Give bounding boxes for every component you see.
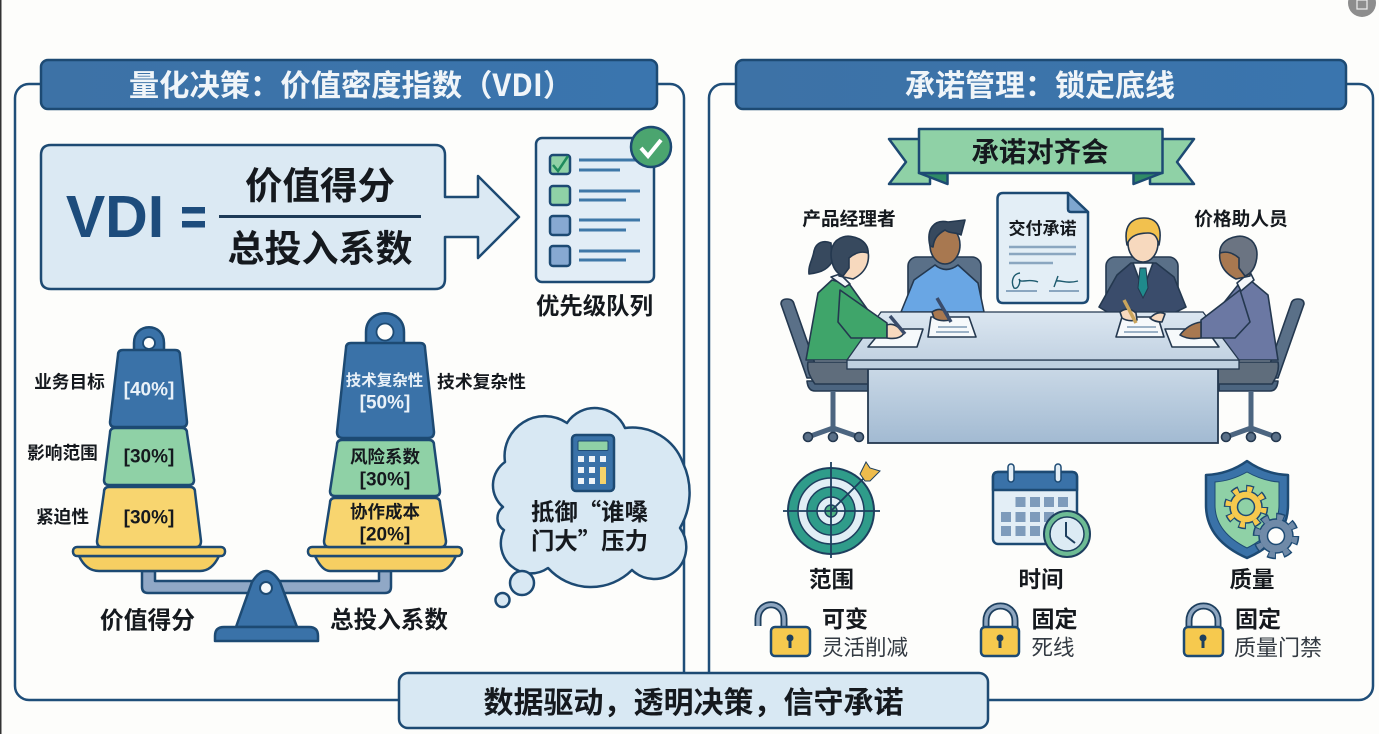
yellow weight: [30%] xyxy=(124,508,174,528)
panel: quantified decision xyxy=(15,60,690,700)
label: business goal: 业务目标 xyxy=(34,372,105,392)
panel frame right xyxy=(709,84,1373,700)
equals sign xyxy=(182,207,205,228)
icon: calendar with clock xyxy=(993,464,1090,557)
label: priority queue: 优先级队列 xyxy=(536,293,653,319)
icon: open lock xyxy=(758,605,810,656)
ribbon banner: 承诺对齐会 xyxy=(972,136,1108,168)
icon: calculator xyxy=(572,435,614,491)
green weight: [30%] xyxy=(360,470,410,490)
left pan xyxy=(73,547,225,571)
scale fulcrum xyxy=(215,571,318,641)
ribbon banner xyxy=(889,129,1194,184)
green weight: 风险系数 xyxy=(350,447,420,467)
heading: VDI xyxy=(41,60,657,109)
bottom banner xyxy=(399,673,988,728)
label: quality: 质量 xyxy=(1229,568,1275,592)
panel: commitment management xyxy=(709,60,1373,700)
blue weight: [50%] xyxy=(360,392,410,414)
label: time: 时间 xyxy=(1018,568,1064,592)
right chair xyxy=(1219,299,1304,442)
icon: closed lock time xyxy=(981,606,1019,656)
icon: target xyxy=(783,462,880,558)
icon: priority checklist xyxy=(536,127,671,282)
yellow weight xyxy=(324,498,446,547)
person: suit xyxy=(1099,218,1186,318)
heading: commitment management xyxy=(736,60,1346,109)
right pan xyxy=(308,547,462,571)
blue weight xyxy=(337,313,434,438)
numerator: 价值得分 xyxy=(245,165,395,207)
label: product manager: 产品经理者 xyxy=(802,208,896,230)
yellow weight xyxy=(97,487,201,547)
blue weight: 技术复杂性 xyxy=(346,370,423,390)
scope status: 灵活削减 xyxy=(822,636,908,660)
time status: 死线 xyxy=(1031,636,1075,660)
heading: commitment management: 承诺管理：锁定底线 xyxy=(905,61,1175,105)
quality status xyxy=(1234,606,1322,660)
blue weight: [40%] xyxy=(124,380,174,400)
label: technical complexity: 技术复杂性 xyxy=(437,372,526,392)
formula box with arrow xyxy=(41,145,519,289)
label: scope: 范围 xyxy=(809,568,854,592)
meeting scene xyxy=(781,218,1304,443)
person: blue shirt xyxy=(901,220,984,313)
panel frame left xyxy=(15,84,684,700)
yellow weight: 协作成本 xyxy=(350,502,420,522)
time status: 固定 xyxy=(1032,606,1078,632)
green weight xyxy=(330,440,440,496)
green weight xyxy=(104,428,194,485)
balance scale xyxy=(73,313,462,641)
scale beam xyxy=(142,571,391,593)
label: price facilitator: 价格助人员 xyxy=(1194,208,1288,230)
label: urgency: 紧迫性 xyxy=(36,506,89,527)
left chair xyxy=(781,299,868,442)
blue weight xyxy=(110,327,187,427)
person: slate jacket body xyxy=(1210,236,1278,384)
papers on the table xyxy=(868,317,1219,347)
scope status xyxy=(822,606,908,660)
label: value score: 价值得分 xyxy=(100,608,195,634)
quality status: 质量门禁 xyxy=(1234,636,1322,660)
thought bubble small xyxy=(496,593,510,607)
icon: shield with gears xyxy=(1206,461,1295,558)
window button xyxy=(1348,0,1376,17)
time status xyxy=(1031,606,1078,660)
bottom banner: 数据驱动，透明决策，信守承诺 xyxy=(484,678,904,722)
icon: closed lock quality xyxy=(1184,606,1223,656)
label: total input coefficient: 总投入系数 xyxy=(330,607,448,634)
arms, hands and pens xyxy=(838,290,1250,339)
left weight stack xyxy=(97,327,201,547)
person: green sweater body xyxy=(806,236,875,384)
document: delivery commitment: 交付承诺 xyxy=(1008,218,1076,238)
formula text VDI: VDI xyxy=(66,184,164,250)
quality status: 固定 xyxy=(1235,606,1281,632)
scope status: 可变 xyxy=(822,606,868,632)
cloud text: 抵御“谁嗓 xyxy=(531,493,648,527)
thought cloud xyxy=(493,408,690,607)
label: impact scope: 影响范围 xyxy=(27,443,98,463)
yellow weight: [20%] xyxy=(360,524,410,546)
right weight stack xyxy=(324,313,446,547)
heading: VDI: 量化决策：价值密度指数（VDI） xyxy=(129,61,573,105)
thought cloud: 门大”压力 xyxy=(531,522,648,556)
meeting table xyxy=(847,312,1239,443)
green weight: [30%] xyxy=(124,446,174,468)
document: delivery commitment xyxy=(998,193,1088,303)
thought bubble large xyxy=(510,571,534,595)
denominator: 总投入系数 xyxy=(228,228,412,270)
